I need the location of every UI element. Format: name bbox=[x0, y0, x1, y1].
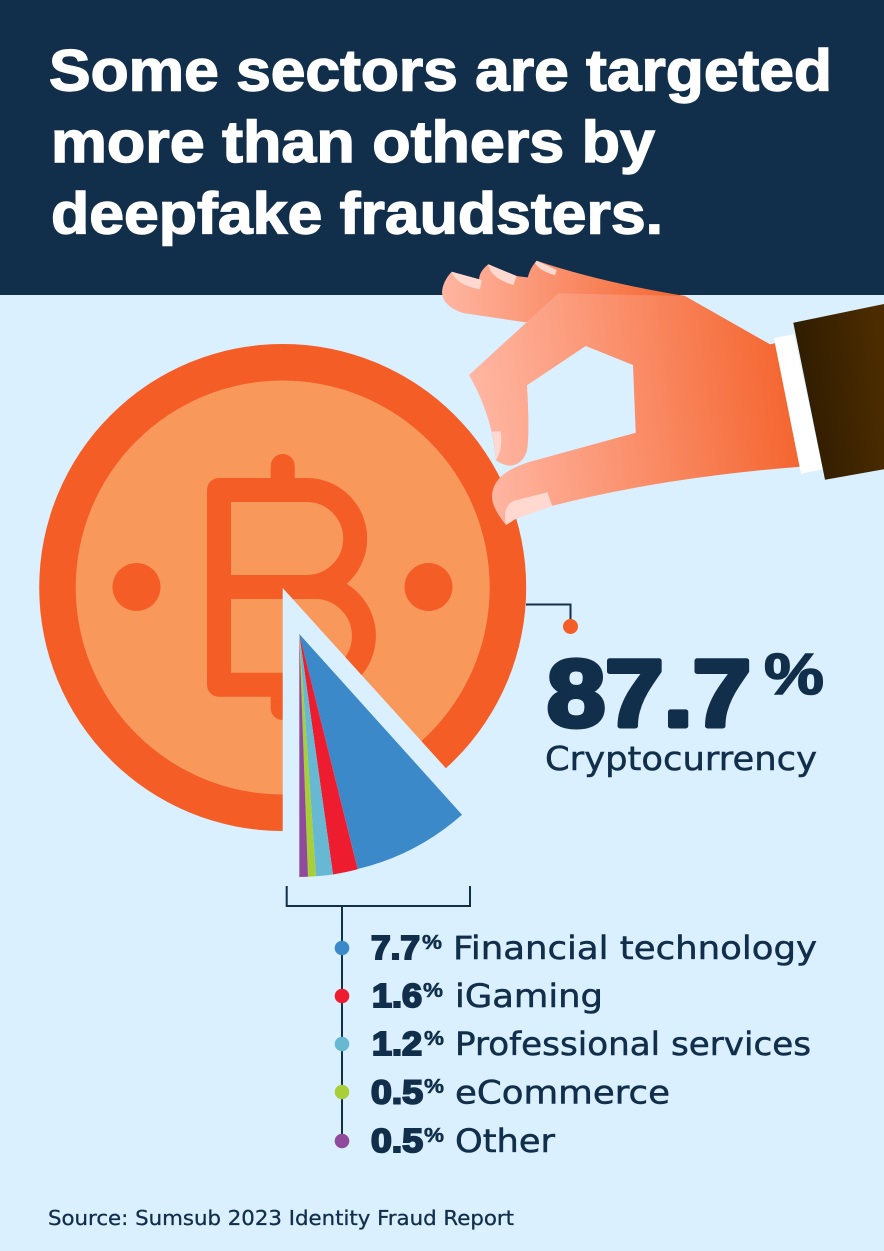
legend: financial technology: 7.7 bbox=[371, 929, 420, 966]
legend: eCommerce: % bbox=[424, 1076, 444, 1098]
title: deepfake fraudsters. bbox=[51, 182, 663, 246]
header band bbox=[0, 0, 884, 295]
bracket and legend spine bbox=[287, 886, 470, 1141]
legend: iGaming: 1.6 bbox=[372, 977, 422, 1014]
source note: Source: Sumsub 2023 Identity Fraud Report bbox=[48, 1206, 514, 1230]
connector: coin to cryptocurrency figure bbox=[526, 604, 578, 634]
legend: financial technology bbox=[335, 929, 817, 967]
pie slice: minority sectors bbox=[299, 634, 462, 877]
stat: 87.7% cryptocurrency bbox=[545, 641, 824, 778]
legend: professional services: 1.2 bbox=[372, 1025, 422, 1062]
legend: other: 0.5 bbox=[371, 1122, 423, 1159]
legend: other: Other bbox=[455, 1122, 556, 1160]
legend: financial technology: % bbox=[422, 932, 442, 954]
legend: professional services: Professional services bbox=[455, 1025, 811, 1063]
legend: other bbox=[335, 1122, 556, 1160]
legend: eCommerce: eCommerce bbox=[455, 1074, 670, 1112]
legend: eCommerce bbox=[335, 1074, 670, 1112]
title bbox=[49, 38, 832, 246]
stat: 87.7% cryptocurrency: % bbox=[764, 642, 824, 707]
stat: 87.7% cryptocurrency: 87.7 bbox=[547, 641, 751, 747]
legend: eCommerce: 0.5 bbox=[371, 1074, 423, 1110]
legend: iGaming: iGaming bbox=[455, 977, 603, 1015]
legend: financial technology: Financial technology bbox=[453, 929, 817, 967]
legend: professional services: % bbox=[424, 1028, 444, 1050]
legend: iGaming bbox=[335, 977, 603, 1015]
stat: 87.7% cryptocurrency: Cryptocurrency bbox=[545, 739, 817, 778]
hand pinching the coin slice bbox=[442, 261, 884, 525]
icon: bitcoin coin with slice removed bbox=[39, 344, 526, 860]
title: Some sectors are targeted bbox=[49, 38, 832, 104]
legend: iGaming: % bbox=[423, 980, 443, 1002]
legend: other: % bbox=[424, 1125, 444, 1147]
title: more than others by bbox=[51, 110, 655, 175]
